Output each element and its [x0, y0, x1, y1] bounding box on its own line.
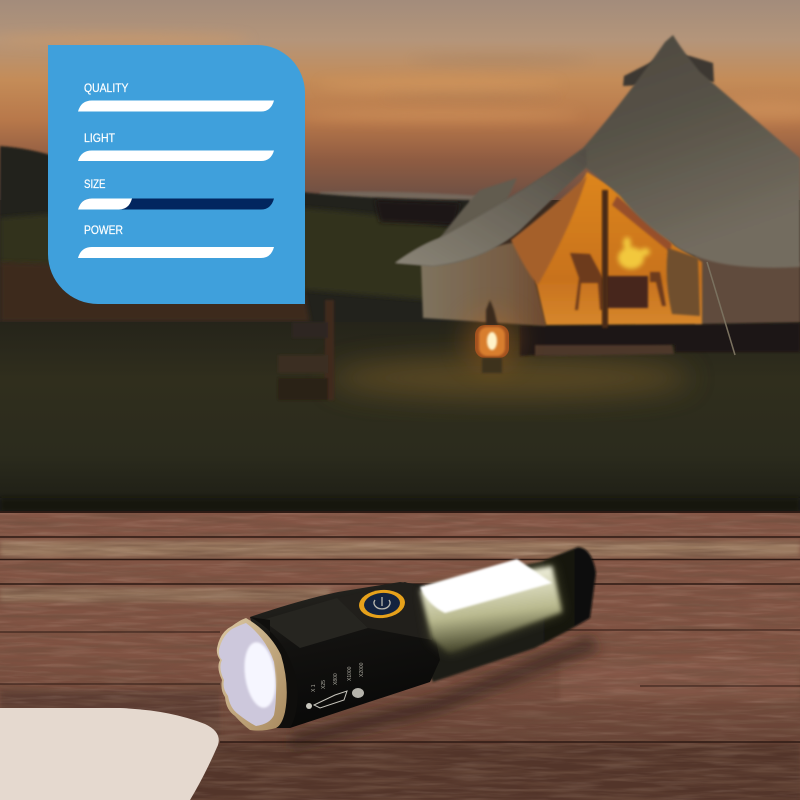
flashlight: switch collar — [337, 582, 432, 640]
lantern — [466, 300, 518, 373]
tent: back roof — [433, 178, 517, 247]
flashlight: gold bezel — [217, 618, 287, 731]
rating: size — [78, 179, 274, 210]
flashlight: COB panel — [420, 559, 552, 613]
rating: light — [78, 133, 274, 161]
rating: power — [78, 225, 274, 258]
flashlight: body — [250, 582, 440, 728]
wooden fence post — [278, 300, 334, 400]
tent: right curtain — [667, 248, 700, 316]
tent: left curtain — [511, 176, 587, 285]
flashlight: shadow — [290, 635, 600, 750]
white reflection on table — [0, 708, 219, 800]
flashlight: lens — [241, 640, 279, 710]
flashlight: black ring — [250, 617, 298, 728]
flashlight: small dot — [306, 703, 312, 709]
tent: right wall — [695, 255, 800, 324]
flashlight: zoom scale labels: X800 — [333, 673, 339, 685]
flashlight: power button — [358, 588, 406, 620]
tent: lit interior — [536, 172, 702, 325]
table: bleached plank streaks — [0, 541, 800, 800]
flashlight: zoom marker — [352, 688, 364, 698]
tent: center pole — [602, 190, 608, 328]
flashlight: head facet — [262, 598, 368, 648]
tent: top vent — [623, 54, 714, 86]
flashlight: arrow mark — [314, 691, 347, 708]
flashlight: zoom scale labels — [311, 662, 365, 692]
tent: deck — [520, 323, 800, 356]
rating: size: SIZE — [84, 179, 106, 191]
tent: left roof panel — [395, 148, 587, 266]
flashlight — [217, 547, 600, 750]
wooden table — [0, 511, 800, 800]
background: grass field — [0, 322, 800, 512]
flashlight: zoom scale labels: X 1 — [311, 684, 317, 692]
rating: quality: QUALITY — [84, 83, 129, 95]
tent: glowing plant — [618, 237, 650, 269]
flashlight: rear body — [414, 547, 596, 682]
flashlight: zoom scale labels: X25 — [321, 680, 327, 689]
bell tent — [395, 35, 800, 356]
rating: light: LIGHT — [84, 133, 115, 145]
rating: power: POWER — [84, 225, 123, 237]
background: distant hills — [0, 146, 480, 335]
tent: right curtain top — [612, 196, 672, 252]
flashlight: glow halo — [424, 564, 562, 652]
table: dark grain — [0, 511, 800, 800]
rating: quality — [78, 83, 274, 112]
tent: left wall — [421, 240, 546, 326]
tent: guy rope — [707, 262, 735, 355]
table: plank seams — [0, 512, 800, 742]
tent: main roof — [395, 35, 800, 268]
flashlight: lit side body — [420, 566, 562, 652]
panel: product ratings — [48, 45, 305, 304]
flashlight: bezel inner — [219, 623, 276, 726]
tent: table and chairs — [570, 253, 666, 310]
flashlight: zoom scale labels: X2000 — [359, 662, 365, 677]
background: sunset sky — [0, 0, 800, 200]
flashlight: zoom scale labels: X1000 — [347, 666, 353, 681]
table: light grain — [0, 511, 800, 800]
